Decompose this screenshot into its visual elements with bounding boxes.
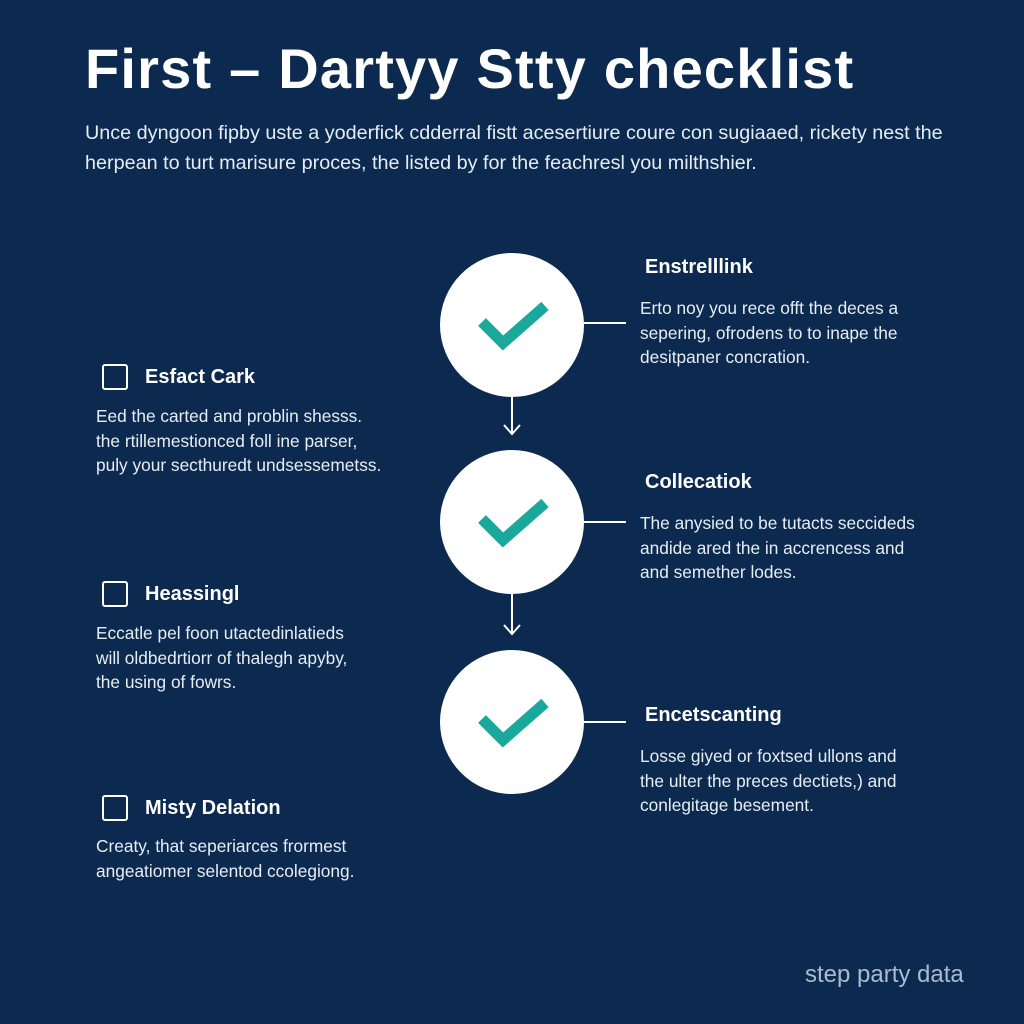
left item 1: Eed the carted and problin shesss. (96, 406, 362, 426)
left item 2 (96, 581, 347, 692)
step 2 circle (440, 450, 626, 594)
right text 2: Collecatiok (645, 471, 752, 493)
subtitle: Unce dyngoon fipby uste a yoderfick cdderral fistt acesertiure coure con sugiaaed, rickety nest the (85, 122, 943, 144)
left item 1: the rtillemestionced foll ine parser, (96, 430, 357, 450)
right text 3: Losse giyed or foxtsed ullons and (640, 746, 897, 766)
left item 3: Misty Delation (145, 797, 281, 819)
left item 3: angeatiomer selentod ccolegiong. (96, 860, 354, 880)
right text 2: andide ared the in accrencess and (640, 538, 904, 558)
step 3 circle (440, 650, 626, 794)
left item 1: Esfact Cark (145, 366, 255, 388)
step 1 circle (440, 253, 626, 397)
left item 2: Heassingl (145, 583, 239, 605)
right text 1: Erto noy you rece offt the deces a (640, 298, 898, 318)
right text 1: desitpaner concration. (640, 347, 810, 367)
right text 2: and semether lodes. (640, 562, 797, 582)
left item 2: Eccatle pel foon utactedinlatieds (96, 623, 344, 643)
right text 3: the ulter the preces dectiets,) and (640, 770, 896, 790)
title: First – Dartyy Stty checklist (85, 37, 854, 100)
subtitle: herpean to turt marisure proces, the listed by for the feachresl you milthshier. (85, 152, 757, 174)
right text 2: The anysied to be tutacts seccideds (640, 513, 915, 533)
right text 3 (640, 704, 897, 815)
arrow 1 (504, 397, 520, 434)
left item 3 (96, 795, 354, 880)
right text 1: sepering, ofrodens to to inape the (640, 322, 897, 342)
right text 3: Encetscanting (645, 704, 782, 726)
right text 1 (640, 256, 898, 367)
right text 3: conlegitage besement. (640, 795, 814, 815)
left item 2: will oldbedrtiorr of thalegh apyby, (96, 648, 347, 668)
right text 2 (640, 471, 915, 582)
footer: step party data (805, 961, 964, 988)
arrow 2 (504, 594, 520, 634)
subtitle (85, 122, 943, 174)
left item 2: the using of fowrs. (96, 672, 236, 692)
left item 3: Creaty, that seperiarces frormest (96, 836, 346, 856)
left item 1: puly your secthuredt undsessemetss. (96, 455, 381, 475)
right text 1: Enstrelllink (645, 256, 753, 278)
left item 1 (96, 364, 381, 475)
